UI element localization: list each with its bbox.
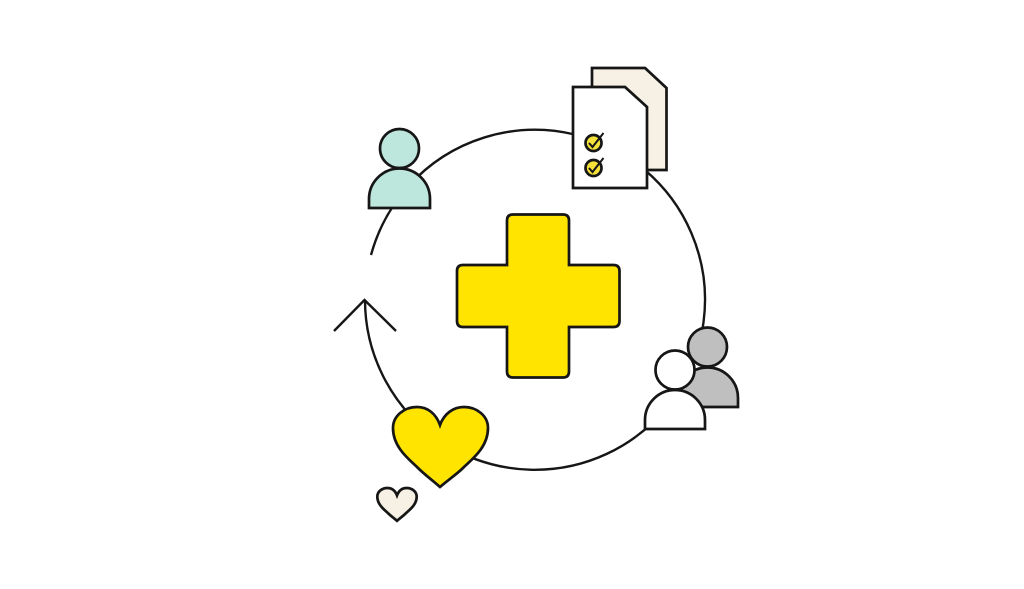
- white person: [645, 350, 705, 429]
- icon: teal person: [369, 129, 430, 208]
- icon: checklist documents: [573, 68, 666, 188]
- icon: central medical cross: [457, 214, 620, 378]
- check item one: [586, 133, 604, 151]
- grey person: [677, 328, 738, 407]
- icon: large yellow heart: [393, 407, 488, 487]
- front document: [573, 87, 647, 188]
- back document: [592, 68, 666, 170]
- icon: pair of people: [645, 328, 738, 429]
- check item two: [586, 158, 604, 176]
- cycle ring arc: [365, 130, 705, 470]
- arrow head: [334, 300, 396, 331]
- icon: small cream heart: [377, 488, 417, 521]
